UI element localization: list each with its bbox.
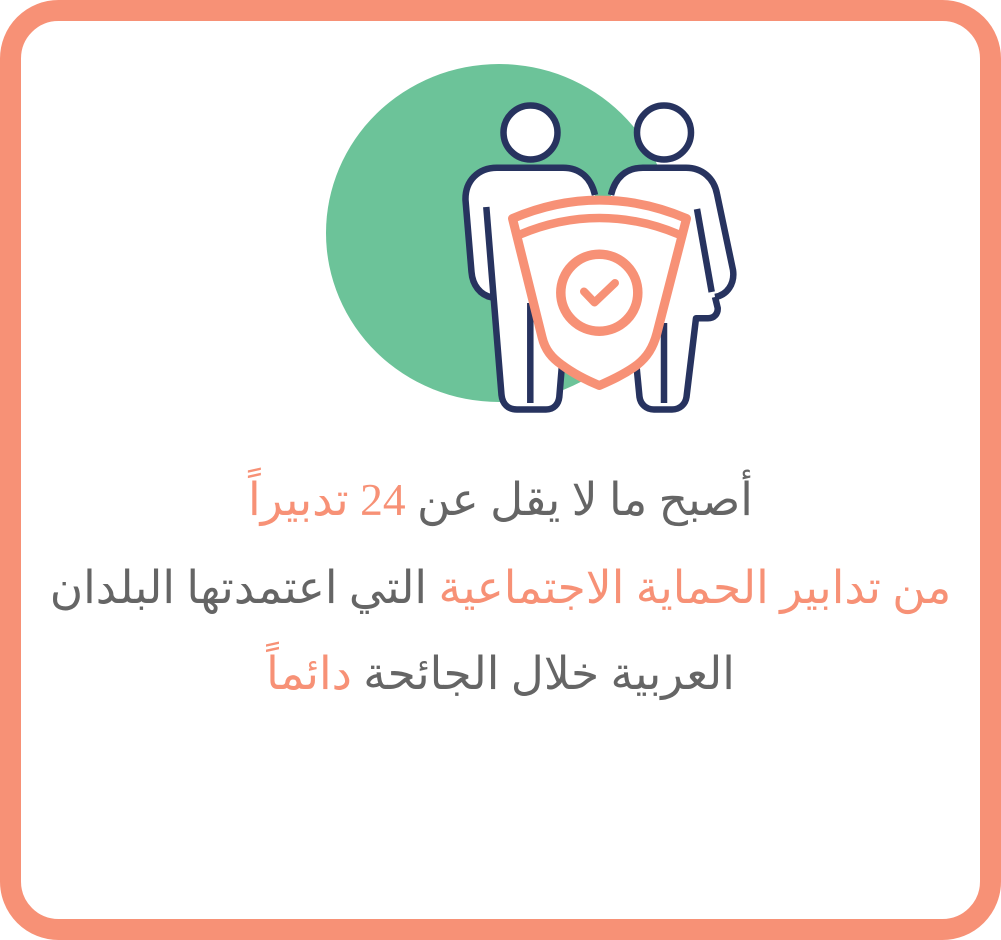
text line 2: من تدابير الحماية الاجتماعية التي اعتمدتها البلدان (50, 562, 951, 613)
icon: two people behind shield (465, 106, 733, 410)
green circle (326, 64, 672, 402)
text line 1: أصبح ما لا يقل عن 24 تدبيراً (248, 474, 753, 525)
check badge (561, 254, 638, 331)
right person (611, 106, 733, 410)
text block: headline statement (50, 468, 951, 700)
icon: shield (512, 200, 686, 386)
left person (465, 106, 595, 410)
text line 3: العربية خلال الجائحة دائماً (266, 648, 735, 699)
